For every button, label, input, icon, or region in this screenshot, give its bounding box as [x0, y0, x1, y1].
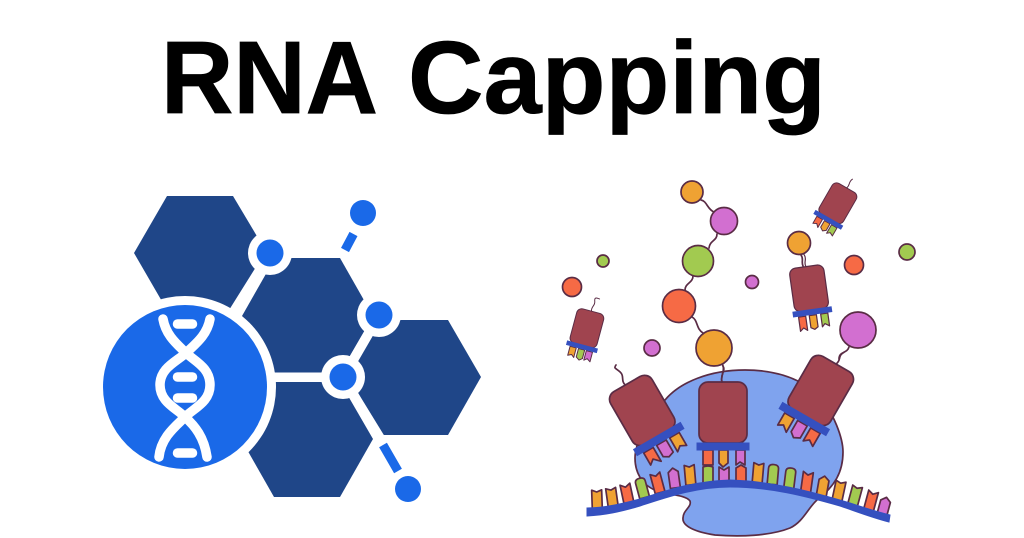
tRNA: right on ribosome [770, 338, 866, 451]
hexagon: centre [242, 258, 373, 373]
peptide chain links [685, 200, 849, 382]
DNA helix [159, 319, 210, 457]
tRNA: free top right [808, 171, 865, 238]
title [161, 20, 826, 135]
title: RNA [161, 20, 378, 135]
blue dashes [345, 234, 398, 471]
peptide chain amino acids [662, 181, 738, 366]
illustration: ribosome translation [562, 171, 915, 536]
blue nodes [256, 200, 421, 502]
tRNA: left on ribosome [593, 351, 692, 470]
tRNA: free left [563, 294, 610, 364]
hexagon: bottom [241, 382, 373, 497]
tRNA: centre on ribosome [697, 358, 749, 467]
connector lines [225, 253, 400, 470]
DNA circle [94, 296, 276, 478]
ribosome blob [635, 370, 843, 536]
hexagon: right [349, 320, 481, 435]
RNA strand [587, 480, 890, 522]
icon: DNA molecule with hexagons [94, 196, 481, 502]
title: Capping [408, 20, 826, 135]
tRNA: free middle right [784, 245, 834, 332]
node rings [248, 231, 401, 399]
RNA bases [592, 463, 891, 518]
hexagon: top left [134, 196, 267, 310]
free amino acids [562, 232, 915, 356]
